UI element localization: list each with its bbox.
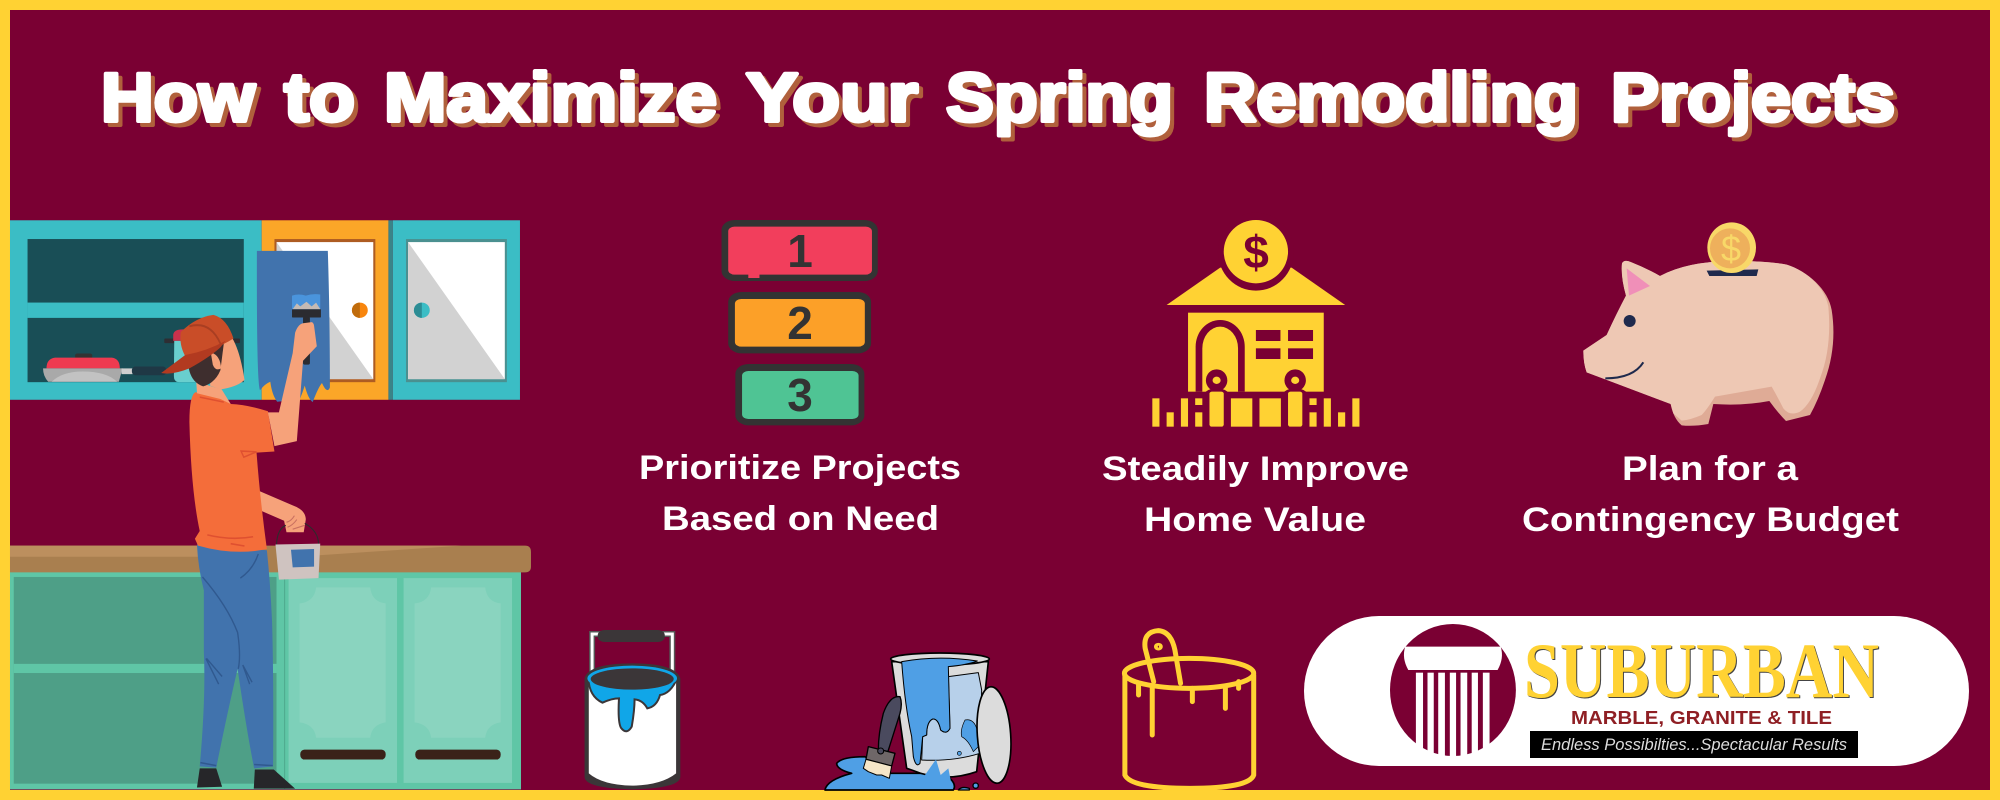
pot on shelf <box>164 329 240 382</box>
upper cabinets <box>10 220 520 400</box>
kitchen illustration with painter <box>10 220 531 789</box>
jeans <box>197 544 273 768</box>
neck and head <box>188 326 244 404</box>
label: prioritize projects: Prioritize Projects <box>639 449 961 487</box>
label: steadily improve home value: Home Value <box>1144 501 1366 539</box>
logo tagline bar <box>1530 731 1858 758</box>
logo tagline bar: Endless Possibilties...Spectacular Results <box>1541 735 1847 754</box>
priority numbers <box>787 225 813 421</box>
icon: outline paint bucket <box>1124 631 1254 788</box>
paint spill <box>825 757 954 790</box>
label: prioritize projects <box>639 449 961 538</box>
title: Maximize <box>384 59 717 136</box>
paint roller brush <box>292 294 321 365</box>
arm holding bucket <box>259 491 306 532</box>
icon: spilled paint can with brush and lid <box>825 653 1014 790</box>
hand bucket <box>275 523 320 580</box>
title: How <box>101 59 255 136</box>
title: Your <box>746 59 918 136</box>
dollar sign on piggy coin: $ <box>1721 228 1741 269</box>
priority numbers: 2 <box>787 297 813 349</box>
logo column emblem <box>1390 624 1516 757</box>
dollar sign on house coin: $ <box>1243 226 1269 278</box>
base cabinets <box>10 571 521 789</box>
can <box>892 662 988 777</box>
shirt <box>189 392 274 552</box>
icon: numbered priority list <box>722 220 878 425</box>
icon: white paint bucket with blue drips <box>585 630 680 789</box>
icon: piggy bank <box>1583 222 1833 426</box>
label: plan for contingency budget: Contingency Budget <box>1522 501 1899 539</box>
raised arm <box>268 322 317 446</box>
paint inside and dripping <box>902 658 977 765</box>
title <box>101 59 1895 136</box>
pan on shelf <box>43 353 166 382</box>
priority numbers: 3 <box>787 369 813 421</box>
cap <box>161 315 233 374</box>
title: Remodling <box>1204 59 1578 136</box>
label: prioritize projects: Based on Need <box>662 500 939 538</box>
label: steadily improve home value <box>1102 450 1409 539</box>
priority numbers: 1 <box>787 225 813 277</box>
label: steadily improve home value: Steadily Improve <box>1102 450 1409 488</box>
title: to <box>284 59 355 136</box>
painter <box>161 315 320 789</box>
paint curtain on door <box>257 251 330 402</box>
label: plan for contingency budget: Plan for a <box>1622 450 1799 488</box>
icon: house with dollar coin <box>1152 213 1359 427</box>
logo wordmark: SUBURBAN <box>1524 627 1879 714</box>
shoes <box>197 768 295 789</box>
brush <box>878 697 901 753</box>
logo badge <box>1304 616 1969 766</box>
countertop <box>10 546 531 572</box>
label: plan for contingency budget <box>1522 450 1899 539</box>
title: Spring <box>946 59 1173 136</box>
lid <box>974 686 1014 784</box>
logo subtitle: MARBLE, GRANITE & TILE <box>1571 707 1832 728</box>
title: Projects <box>1611 59 1895 136</box>
